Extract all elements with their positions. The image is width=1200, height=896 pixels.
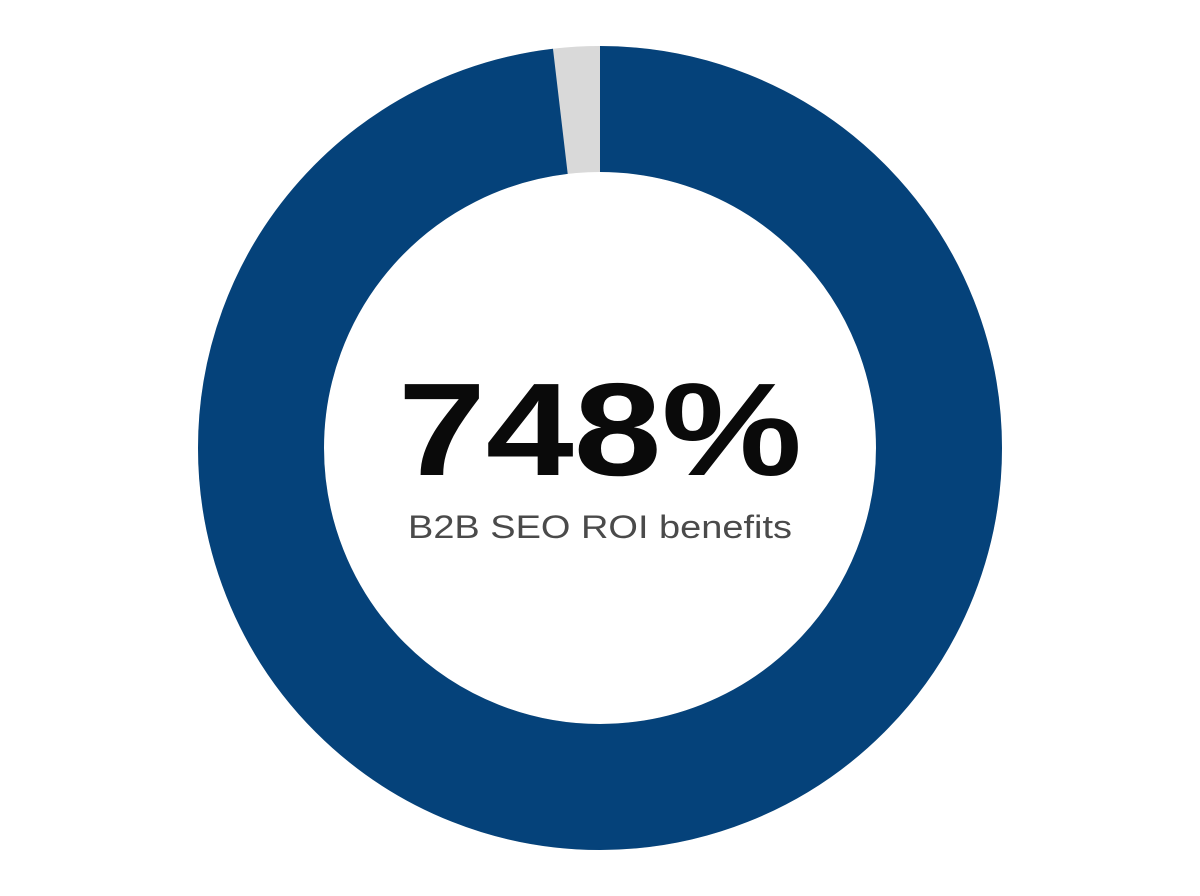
ring: main segment (blue) <box>261 109 939 787</box>
center label: B2B SEO ROI benefits <box>408 509 792 545</box>
center value: 748% <box>398 356 802 503</box>
ring: remainder segment (grey) <box>261 109 939 787</box>
